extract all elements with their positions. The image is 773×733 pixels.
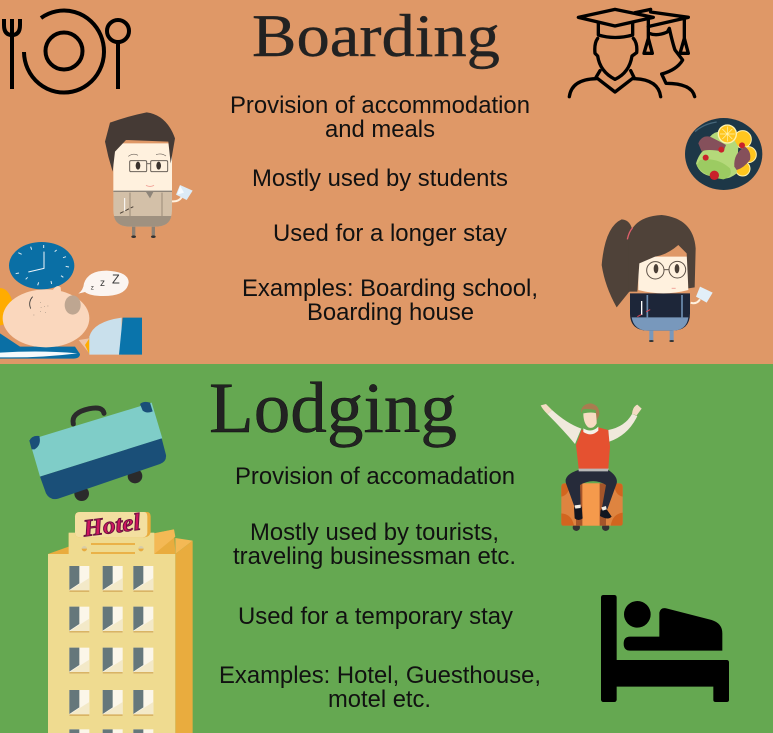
icon: sleeping person and clock: z: [91, 284, 94, 291]
text block: lodging users: [233, 519, 516, 570]
icon: suitcase: [29, 402, 166, 501]
text block: boarding provision: [230, 92, 530, 143]
text block: boarding examples: [242, 275, 538, 326]
icon: person in bed: [601, 595, 729, 702]
text block: boarding stay: Used for a longer stay: [273, 220, 507, 247]
panel: lodging: [0, 364, 773, 733]
windows: [69, 566, 153, 733]
text block: lodging users: Mostly used by tourists,: [250, 519, 499, 546]
text block: boarding examples: Boarding house: [307, 299, 474, 326]
icon: man with book: [105, 112, 193, 238]
text block: boarding provision: Provision of accommodation: [230, 92, 530, 119]
title: Boarding: Boarding: [252, 3, 500, 69]
text block: lodging stay: Used for a temporary stay: [238, 603, 513, 630]
text block: lodging provision: Provision of accomadation: [235, 463, 515, 490]
icon: graduates: [569, 9, 695, 97]
icon: sleeping person and clock: z: [100, 278, 105, 289]
icon: sleeping person and clock: Z: [112, 272, 120, 286]
icon: hotel building: [48, 510, 193, 733]
text block: lodging examples: [219, 662, 541, 713]
panel: boarding: [0, 0, 773, 364]
icon: sleeping person and clock: [0, 242, 142, 359]
icon: salad plate: [685, 118, 762, 190]
text block: lodging users: traveling businessman etc.: [233, 543, 516, 570]
text block: boarding users: Mostly used by students: [252, 165, 508, 192]
text block: lodging examples: Examples: Hotel, Guesthouse,: [219, 662, 541, 689]
text block: lodging examples: motel etc.: [328, 686, 431, 713]
label: Hotel sign: Hotel: [81, 510, 142, 543]
icon: plate and cutlery: [4, 11, 129, 93]
icon: man sitting on suitcase: [541, 403, 642, 531]
icon: woman with book: [602, 215, 713, 342]
text block: boarding examples: Examples: Boarding school,: [242, 275, 538, 302]
text block: boarding provision: and meals: [325, 116, 435, 143]
title: Lodging: Lodging: [209, 368, 457, 448]
